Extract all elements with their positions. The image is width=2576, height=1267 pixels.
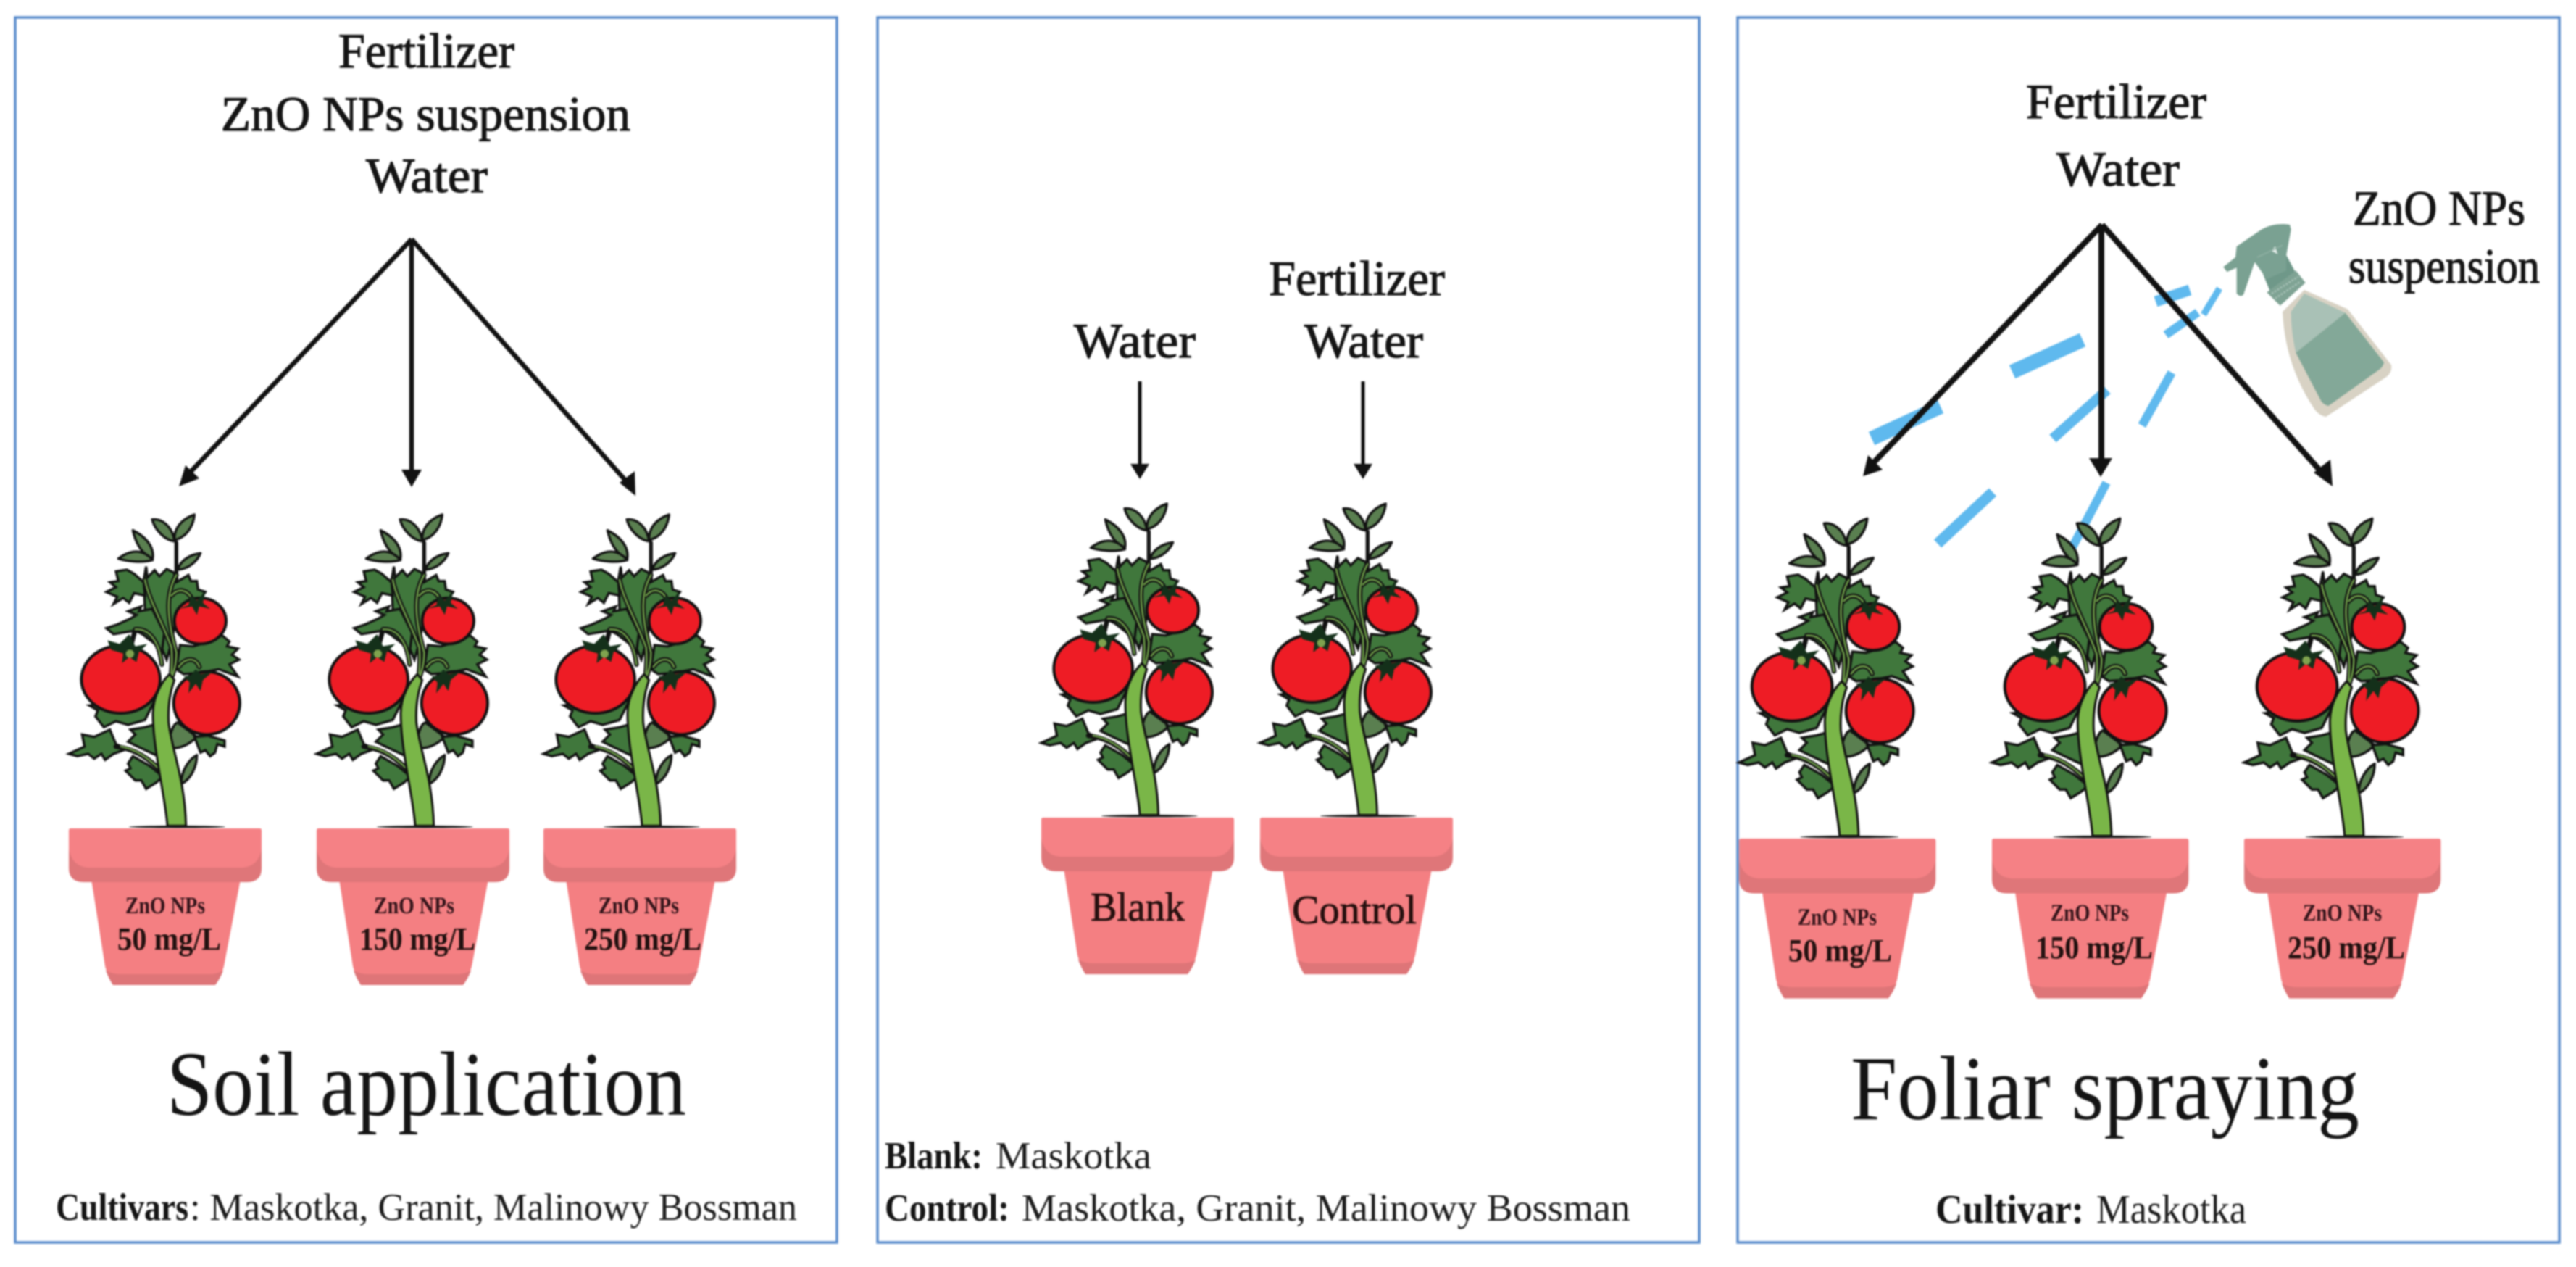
- inputs text: Water: [366, 148, 488, 203]
- plant: 250 mg/L: [543, 515, 736, 985]
- label: ZnO NPs suspension: ZnO NPs: [2353, 180, 2525, 236]
- label: ZnO NPs suspension: suspension: [2348, 238, 2540, 294]
- heading: soil application: Soil application: [167, 1034, 686, 1135]
- plant: 250 mg/L: 250 mg/L: [2288, 930, 2405, 965]
- cultivars note: : Maskotka, Granit, Malinowy Bossman: [190, 1187, 797, 1229]
- panel frame: [15, 17, 837, 1242]
- plant: blank: Blank: [1091, 885, 1185, 930]
- note: blank cultivar: Maskotka: [996, 1135, 1151, 1177]
- note: control cultivars: Control:: [885, 1187, 1009, 1229]
- arrows to plants: [179, 239, 635, 496]
- panel: foliar spraying: [1738, 17, 2559, 1242]
- plant: 250 mg/L: 250 mg/L: [584, 921, 701, 957]
- cultivars note: Cultivars: [56, 1187, 188, 1229]
- plant: 50 mg/L: ZnO NPs: [125, 893, 205, 919]
- label: fertilizer and water: [1269, 251, 1445, 368]
- plant: 150 mg/L: 150 mg/L: [359, 921, 475, 957]
- plant: 250 mg/L: ZnO NPs: [2303, 900, 2382, 926]
- inputs text: [221, 23, 630, 203]
- arrow: water to blank: [1130, 381, 1149, 479]
- arrow: water to control: [1354, 381, 1372, 479]
- plant: 50 mg/L: ZnO NPs: [1798, 905, 1877, 931]
- plant: 150 mg/L: [1992, 518, 2188, 998]
- label: ZnO NPs suspension: [2348, 180, 2540, 294]
- plant: 50 mg/L: [69, 515, 262, 985]
- note: blank cultivar: [885, 1135, 1151, 1177]
- plant: 250 mg/L: ZnO NPs: [599, 893, 679, 919]
- inputs text: Fertilizer: [2026, 74, 2206, 129]
- arrows to plants: [1863, 225, 2333, 486]
- inputs text: Water: [2056, 141, 2180, 196]
- note: control cultivars: Maskotka, Granit, Malinowy Bossman: [1022, 1187, 1630, 1229]
- spray droplets: [1872, 288, 2219, 547]
- inputs text: Fertilizer: [338, 23, 514, 78]
- plant: 150 mg/L: [317, 515, 509, 985]
- note: blank cultivar: Blank:: [885, 1135, 983, 1177]
- plant: blank: [1041, 504, 1234, 974]
- panel: soil application: [15, 17, 837, 1242]
- panel frame: [878, 17, 1699, 1242]
- cultivar note: Maskotka: [2096, 1187, 2246, 1232]
- panel: blank and control: [878, 17, 1699, 1242]
- heading: foliar spraying: Foliar spraying: [1851, 1039, 2359, 1139]
- plant: 150 mg/L: ZnO NPs: [2051, 900, 2129, 926]
- icon: spray bottle: [2223, 224, 2391, 417]
- plant: 150 mg/L: 150 mg/L: [2035, 930, 2153, 965]
- inputs text: ZnO NPs suspension: [221, 86, 630, 141]
- plant: 50 mg/L: [1739, 518, 1935, 998]
- plant: 50 mg/L: 50 mg/L: [1788, 933, 1892, 968]
- cultivar note: [1935, 1187, 2246, 1232]
- plant: control: [1260, 504, 1453, 974]
- cultivar note: Cultivar:: [1935, 1187, 2084, 1232]
- label: fertilizer and water: Fertilizer: [1269, 251, 1445, 306]
- label: water: Water: [1074, 313, 1196, 368]
- label: fertilizer and water: Water: [1304, 313, 1423, 368]
- panel frame: [1738, 17, 2559, 1242]
- plant: 250 mg/L: [2244, 518, 2440, 998]
- inputs text: [2026, 74, 2206, 196]
- plant: 50 mg/L: 50 mg/L: [117, 921, 221, 957]
- plant: 150 mg/L: ZnO NPs: [374, 893, 454, 919]
- plant: control: Control: [1292, 888, 1417, 933]
